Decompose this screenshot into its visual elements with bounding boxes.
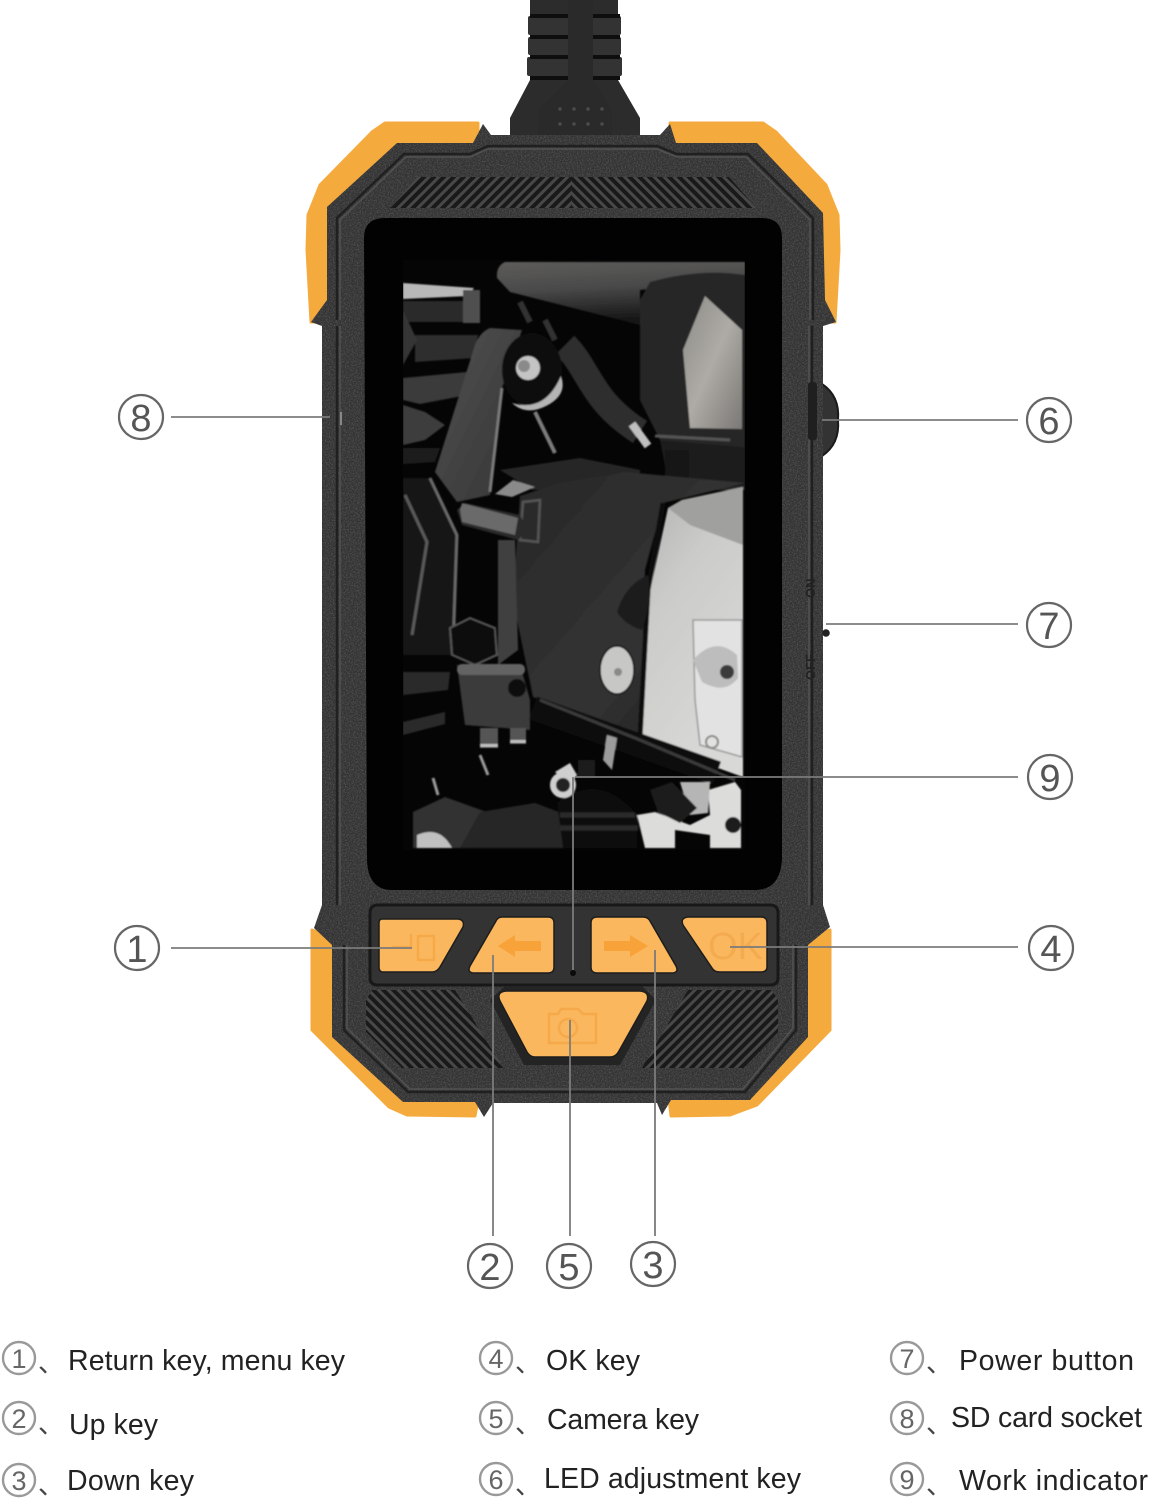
callout 7: power [826,603,1071,648]
shelf [500,458,640,490]
legend item 1: 1 [11,1344,27,1374]
callout 8: SD card socket: 8 [130,398,152,440]
callout 6: LED adjustment [822,398,1071,443]
legend item 1 [3,1342,346,1380]
lower hose band [533,708,717,773]
camera button [499,991,648,1057]
callout 7: power: 7 [1038,606,1060,648]
legend item 4: 4 [488,1344,504,1374]
legend item 5 [480,1402,700,1441]
button 4: OK [682,917,767,972]
callout 3: down key [631,950,675,1287]
legend item 3: 3 [11,1466,27,1496]
side button details: OFF [803,654,818,680]
main body shell [311,124,836,1117]
top grille [390,177,756,208]
metal ring [553,763,577,795]
callout 6: LED adjustment: 6 [1038,401,1060,443]
button 2: left arrow [469,917,554,973]
pinhole indicator [570,970,576,976]
knob [450,618,497,665]
left side panel [403,478,457,655]
cap bolt [600,646,634,694]
upper dark block [640,273,745,490]
orange corner bumpers [307,123,839,1116]
camera picture: engine bay [403,260,745,850]
legend item 7 [891,1342,1134,1380]
legend item 3 [3,1464,195,1500]
legend item 4 [480,1342,641,1380]
button 3: right arrow [591,917,677,973]
legend item 5: Camera key [547,1404,700,1436]
callout 9: work indicator [573,755,1072,970]
callout 8: SD card socket [119,395,330,440]
hose [565,345,640,432]
legend item 9: Work indicator [959,1465,1148,1497]
oil filter [557,789,637,848]
legend item 7: 、 [926,1343,952,1380]
legend item 5: 5 [488,1404,504,1434]
side button details: ON [803,578,818,598]
legend item 8: SD card socket [951,1402,1142,1434]
top left white strip [403,283,474,299]
button 4: OK: OK [708,926,763,968]
legend item 1: 、 [38,1343,64,1380]
legend item 2: Up key [69,1409,159,1441]
legend item 7: 7 [899,1344,915,1374]
legend item 4: OK key [546,1345,641,1377]
arm [435,328,522,502]
left lower parts [403,672,450,735]
main dark housing [513,472,745,740]
lower right white parts [637,782,741,848]
side wheel [822,384,838,456]
cable and connector [510,0,640,137]
top left tubes [403,290,555,464]
legend item 2: 2 [11,1404,27,1434]
button well [370,905,778,985]
lower left grille [366,990,503,1068]
legend item 7: Power button [959,1345,1134,1377]
top tube [497,262,745,325]
legend item 9: 9 [899,1465,915,1495]
callout 4: OK key [730,926,1073,971]
callout 5: camera key [547,1020,591,1289]
legend item 6 [480,1463,802,1500]
body speckle texture [305,120,845,1120]
legend item 2 [3,1402,159,1441]
screen bezel [364,218,782,890]
latches and stem [520,500,540,542]
light aluminium housing [640,487,743,777]
callout 2: up key [468,955,512,1289]
legend [3,1342,1148,1500]
legend item 6: 6 [488,1465,504,1495]
legend item 2: 、 [38,1404,64,1441]
callout 3: down key: 3 [642,1245,664,1287]
lower block [457,664,530,730]
callout 1: return key: 1 [126,929,148,971]
lower right grille [642,990,778,1068]
clip [603,735,617,770]
device [305,0,845,1120]
black pulley and bolt [502,333,562,407]
aluminium fitting [693,620,742,757]
connector [650,782,697,823]
body inner bevel [337,146,813,1092]
legend item 8: 、 [926,1404,952,1441]
callout 2: up key: 2 [479,1247,501,1289]
legend item 9 [891,1463,1148,1500]
side button details [340,382,830,680]
legend item 3: Down key [67,1465,195,1497]
legend item 8 [891,1402,1142,1441]
legend item 4: 、 [515,1343,541,1380]
upper light block [683,296,742,429]
callout 1: return key [115,926,412,971]
legend item 8: 8 [899,1404,915,1434]
legend item 1: Return key, menu key [68,1345,346,1377]
legend item 5: 、 [515,1404,541,1441]
callout 5: camera key: 5 [558,1247,580,1289]
legend item 6: LED adjustment key [544,1463,802,1495]
camera well [490,986,656,1065]
callout 4: OK key: 4 [1040,929,1062,971]
callout 9: work indicator: 9 [1039,758,1061,800]
button 1: return and menu [379,919,463,972]
